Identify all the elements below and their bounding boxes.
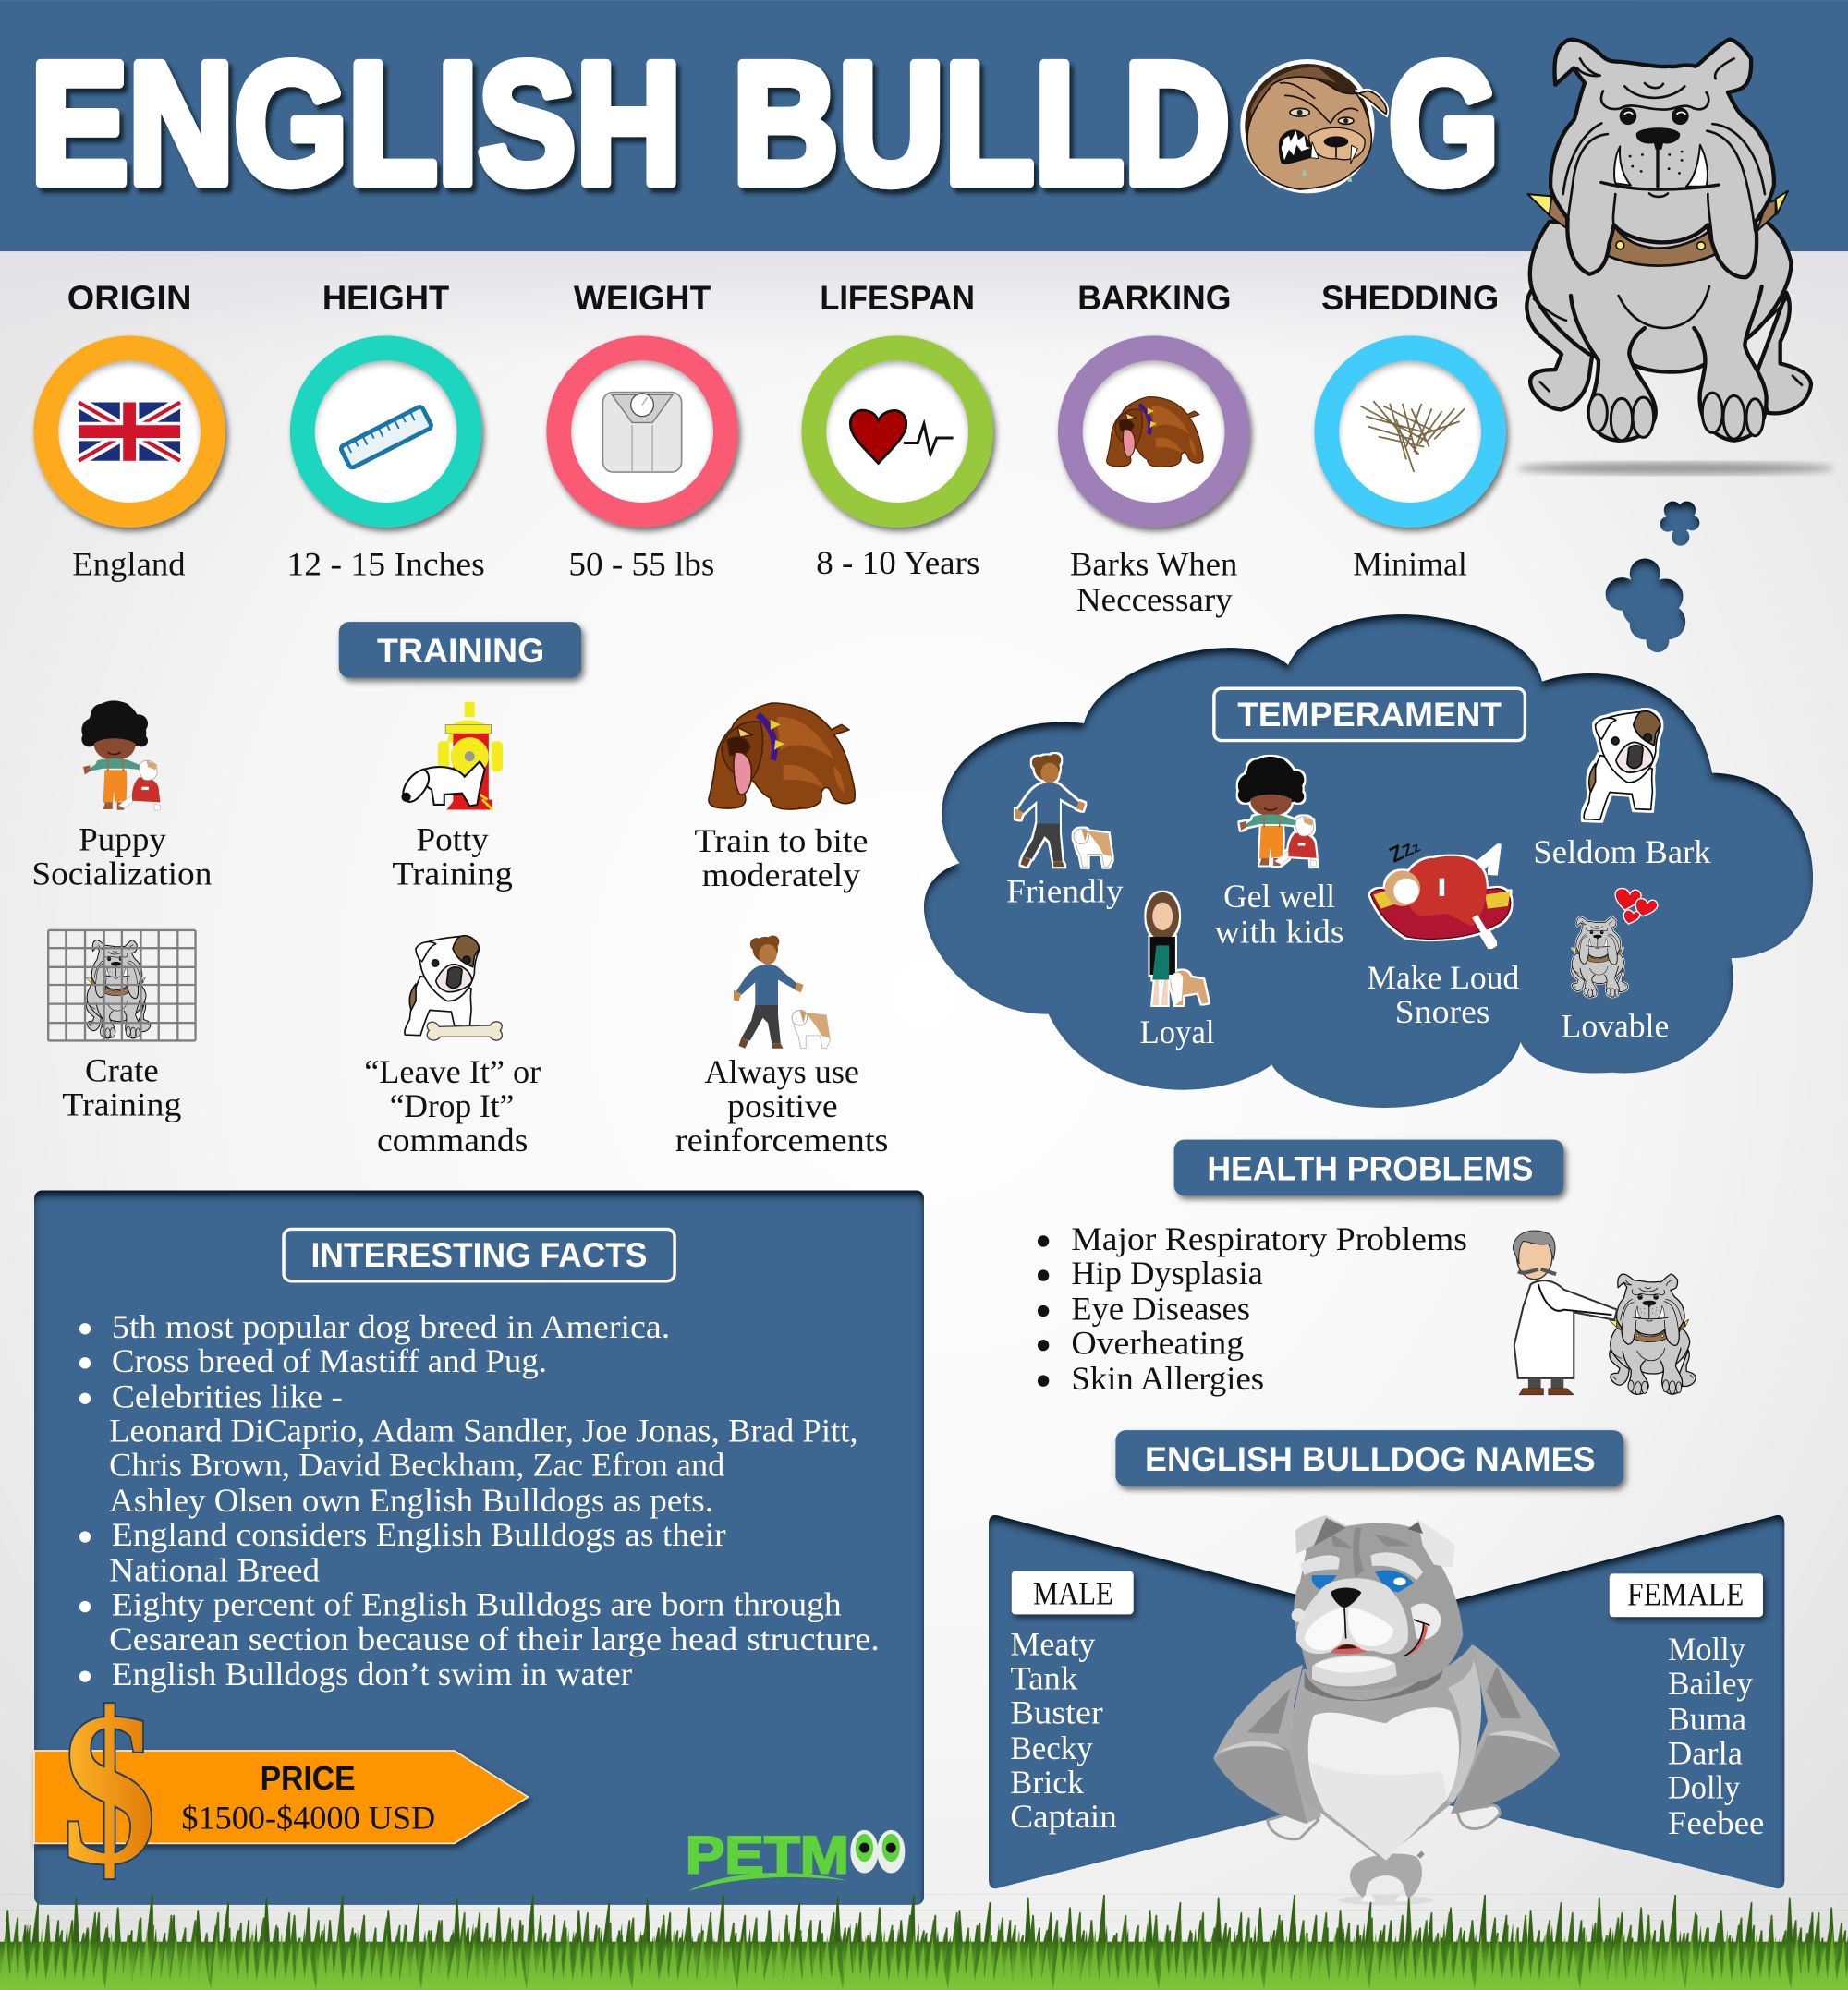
stat: barking bbox=[1058, 278, 1249, 618]
eyes bbox=[1312, 1571, 1414, 1592]
stat: barking: Barks When bbox=[1070, 545, 1237, 582]
icon: smiling gray bulldog mascot bbox=[1213, 1515, 1560, 1905]
neck shadow bbox=[1305, 1660, 1442, 1701]
facts heading bbox=[284, 1229, 675, 1281]
icon: bone bbox=[427, 1022, 502, 1040]
training: potty training bbox=[392, 702, 513, 892]
english bulldog names heading pill: ENGLISH BULLDOG NAMES bbox=[1145, 1439, 1596, 1478]
stat: origin bbox=[33, 278, 225, 582]
training: positive reinforcements bbox=[675, 935, 889, 1159]
training heading pill bbox=[339, 622, 581, 678]
training heading pill: TRAINING bbox=[377, 631, 544, 670]
health problems list: Hip Dysplasia bbox=[1071, 1255, 1263, 1292]
training: crate training bbox=[48, 930, 196, 1122]
facts list: Ashley Olsen own English Bulldogs as pets. bbox=[109, 1482, 713, 1519]
stat: height: HEIGHT bbox=[322, 278, 450, 317]
stat: weight: WEIGHT bbox=[574, 278, 711, 317]
health problems heading pill: HEALTH PROBLEMS bbox=[1207, 1149, 1533, 1188]
facts list: National Breed bbox=[109, 1552, 320, 1589]
price arrow: PRICE bbox=[261, 1760, 356, 1797]
health problems list bbox=[1038, 1220, 1467, 1397]
male names: Buster bbox=[1010, 1693, 1103, 1730]
facts list: English Bulldogs don’t swim in water bbox=[112, 1656, 632, 1693]
training: puppy socialization bbox=[31, 700, 213, 892]
facts list: Cesarean section because of their large head structure. bbox=[109, 1620, 880, 1657]
logo: petmoo: PETM bbox=[686, 1826, 849, 1886]
temperament: seldom bark bbox=[1533, 711, 1711, 870]
temperament: make loud snores: Snores bbox=[1395, 993, 1490, 1030]
icon: large gray cartoon bulldog bbox=[1526, 40, 1811, 441]
training: puppy socialization: Puppy bbox=[79, 820, 166, 857]
grass strip bbox=[0, 1895, 1848, 1990]
male names: Tank bbox=[1010, 1659, 1077, 1696]
icon: heart with pulse bbox=[850, 410, 954, 463]
icon: shed hair tuft bbox=[1361, 401, 1465, 472]
icon: hydrant bbox=[438, 702, 503, 809]
ground shadow and rear legs bbox=[1338, 1850, 1434, 1905]
brows bbox=[1300, 1552, 1423, 1580]
training: train to bite: moderately bbox=[702, 856, 860, 893]
male names: Brick bbox=[1010, 1764, 1084, 1801]
title: G bbox=[1389, 27, 1499, 220]
temperament: friendly: Friendly bbox=[1006, 873, 1124, 910]
health problems list: Eye Diseases bbox=[1071, 1291, 1250, 1328]
cheeks and smile bbox=[1411, 1603, 1441, 1639]
training: train to bite: Train to bite bbox=[694, 822, 869, 859]
icon: gold dollar sign: $ bbox=[62, 1668, 156, 1910]
training: leave it: commands bbox=[377, 1122, 528, 1159]
temperament: lovable bbox=[1562, 889, 1669, 1044]
price arrow bbox=[34, 1668, 528, 1910]
stat: shedding: SHEDDING bbox=[1321, 278, 1499, 317]
facts list: 5th most popular dog breed in America. bbox=[112, 1308, 670, 1345]
training: positive reinforcements: Always use bbox=[704, 1053, 859, 1090]
health problems list: Major Respiratory Problems bbox=[1071, 1220, 1467, 1257]
facts list: Cross breed of Mastiff and Pug. bbox=[112, 1342, 547, 1379]
facts list bbox=[79, 1308, 880, 1693]
arms bbox=[1213, 1644, 1560, 1824]
training: potty training: Training bbox=[392, 855, 513, 892]
price arrow: $1500-$4000 USD bbox=[181, 1799, 435, 1836]
female names: Feebee bbox=[1668, 1804, 1764, 1841]
title: BULLD bbox=[733, 27, 1230, 220]
thought bubbles bbox=[1606, 502, 1699, 652]
stat: shedding: Minimal bbox=[1353, 545, 1467, 582]
stat: origin: ORIGIN bbox=[67, 278, 191, 317]
logo: petmoo bbox=[686, 1826, 905, 1891]
male names: Captain bbox=[1010, 1798, 1117, 1835]
training: leave it bbox=[364, 936, 541, 1159]
temperament label: TEMPERAMENT bbox=[1237, 695, 1502, 734]
panel: interesting facts bbox=[34, 1191, 924, 1910]
white belly bbox=[1308, 1707, 1459, 1860]
training: positive reinforcements: positive bbox=[727, 1087, 838, 1124]
facts list: Celebrities like - bbox=[112, 1377, 343, 1414]
icon: barking brown dog bbox=[1107, 397, 1203, 467]
icon: red hearts bbox=[1615, 889, 1658, 924]
panel: temperament cloud bbox=[924, 614, 1813, 1108]
female names: Molly bbox=[1668, 1631, 1745, 1668]
stat: weight bbox=[546, 278, 738, 582]
male names: MALE bbox=[1033, 1574, 1113, 1611]
dog ground shadow bbox=[1516, 462, 1834, 475]
health problems list: Overheating bbox=[1071, 1325, 1244, 1362]
health problems heading pill bbox=[1174, 1140, 1563, 1195]
female names bbox=[1610, 1573, 1764, 1841]
temperament: gel well with kids: with kids bbox=[1215, 914, 1344, 951]
icon: white dog peeing bbox=[402, 761, 485, 806]
female names: Buma bbox=[1668, 1700, 1746, 1737]
training: potty training: Potty bbox=[417, 820, 489, 857]
stat: origin: England bbox=[72, 545, 186, 582]
chin bbox=[1312, 1656, 1397, 1686]
facts list: Chris Brown, David Beckham, Zac Efron and bbox=[109, 1447, 724, 1484]
training: crate training: Training bbox=[62, 1086, 182, 1122]
icon: vet examining gray dog bbox=[1513, 1231, 1696, 1395]
stat: lifespan: 8 - 10 Years bbox=[816, 544, 979, 581]
temperament: lovable: Lovable bbox=[1562, 1007, 1669, 1044]
stat: barking: BARKING bbox=[1077, 278, 1231, 317]
english bulldog names heading pill bbox=[1115, 1430, 1623, 1486]
training: puppy socialization: Socialization bbox=[31, 855, 213, 892]
temperament: friendly bbox=[1006, 754, 1124, 910]
stat: weight: 50 - 55 lbs bbox=[568, 545, 714, 582]
icon: ruler bbox=[340, 406, 432, 468]
stat: height: 12 - 15 Inches bbox=[286, 545, 485, 582]
stat: shedding bbox=[1314, 278, 1506, 582]
training: leave it: “Drop It” bbox=[390, 1087, 514, 1124]
facts list: Eighty percent of English Bulldogs are born through bbox=[112, 1586, 842, 1623]
muzzle bbox=[1296, 1578, 1408, 1654]
title bbox=[30, 27, 1499, 220]
stat: lifespan bbox=[801, 278, 993, 581]
female names: Dolly bbox=[1668, 1769, 1740, 1806]
female names: Bailey bbox=[1668, 1665, 1753, 1702]
facts list: Leonard DiCaprio, Adam Sandler, Joe Jonas, Brad Pitt, bbox=[109, 1413, 858, 1450]
stat: barking: Neccessary bbox=[1076, 581, 1233, 618]
icon: zzz: ZZz bbox=[1385, 832, 1423, 868]
icon: snarling dog head as letter O bbox=[1240, 59, 1386, 193]
female names: FEMALE bbox=[1627, 1576, 1744, 1613]
upper background shade bbox=[0, 251, 1848, 366]
temperament: loyal bbox=[1140, 892, 1215, 1050]
training: crate training: Crate bbox=[85, 1051, 159, 1088]
temperament: loyal: Loyal bbox=[1140, 1013, 1215, 1050]
icon: bathroom scale bbox=[602, 393, 682, 472]
male names: Becky bbox=[1010, 1729, 1093, 1766]
stat: height bbox=[286, 278, 485, 582]
temperament: make loud snores bbox=[1367, 832, 1519, 1030]
facts heading: INTERESTING FACTS bbox=[311, 1235, 648, 1274]
temperament label bbox=[1214, 688, 1525, 741]
front feet bbox=[1268, 1805, 1500, 1839]
facts list: England considers English Bulldogs as their bbox=[112, 1516, 726, 1553]
ears bbox=[1295, 1515, 1347, 1554]
panel: names bow shape bbox=[989, 1515, 1784, 1888]
stat: lifespan: LIFESPAN bbox=[820, 278, 975, 317]
temperament: gel well with kids: Gel well bbox=[1223, 878, 1335, 915]
training: positive reinforcements: reinforcements bbox=[675, 1122, 889, 1159]
temperament: make loud snores: Make Loud bbox=[1367, 959, 1519, 996]
health problems list: Skin Allergies bbox=[1071, 1360, 1264, 1397]
training: train to bite bbox=[694, 703, 869, 893]
male names: Meaty bbox=[1010, 1625, 1096, 1662]
training: leave it: “Leave It” or bbox=[364, 1053, 541, 1090]
icon: union jack flag bbox=[79, 403, 180, 461]
torso bbox=[1292, 1644, 1481, 1860]
crate grid bbox=[48, 930, 196, 1040]
male names bbox=[1010, 1571, 1134, 1835]
temperament: seldom bark: Seldom Bark bbox=[1533, 833, 1711, 870]
header band bbox=[0, 0, 1848, 251]
title: ENGLISH bbox=[30, 27, 682, 220]
skull bbox=[1294, 1523, 1463, 1690]
female names: Darla bbox=[1668, 1734, 1743, 1771]
temperament: gel well with kids bbox=[1215, 757, 1344, 951]
